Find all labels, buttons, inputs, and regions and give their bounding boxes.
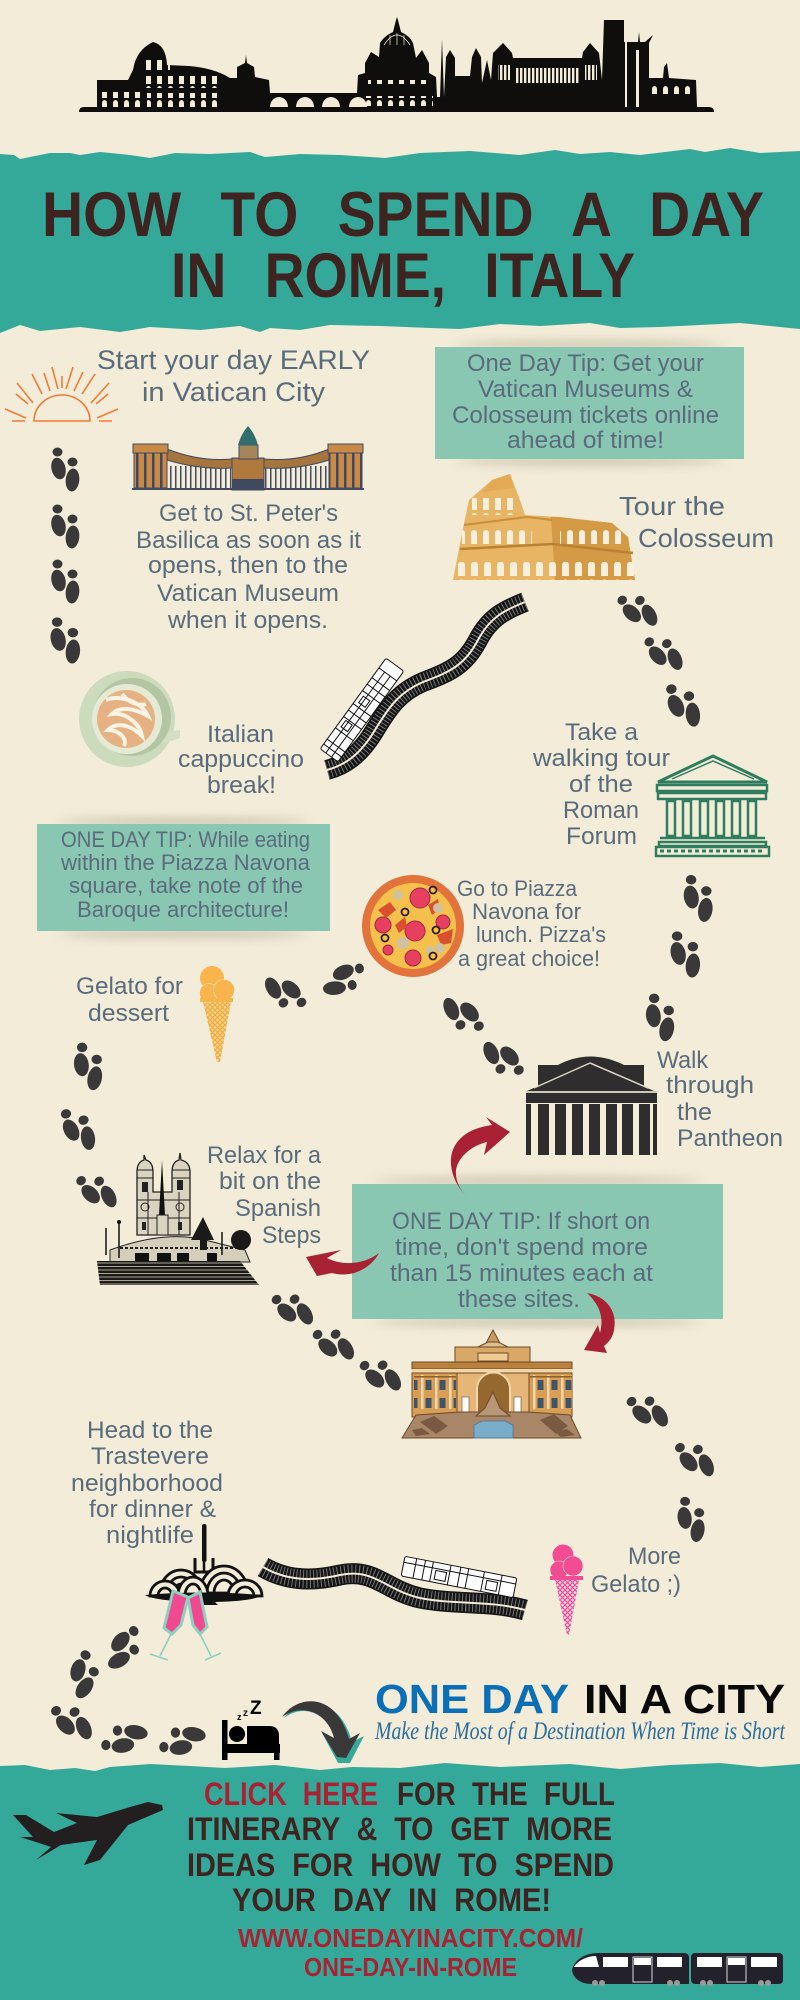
label: more gelato: More [628,1543,681,1570]
label: gelato for dessert: Gelato for [76,973,183,1000]
text: Piazza Navona lunch: a great choice! [458,946,600,971]
footprints trail: Trevi to gelato [622,1385,719,1543]
tip panel: short on time [352,1177,723,1326]
tip panel: Piazza Navona architecture: square, take note of the [69,873,303,898]
label: relax on the Spanish Steps: bit on the [219,1168,321,1195]
text: St. Peter's Basilica: opens, then to the [148,552,348,579]
text: Piazza Navona lunch: Go to Piazza [457,876,578,901]
tip panel: tickets: Colosseum tickets online [452,402,719,429]
label: walking tour of the Roman Forum: Forum [566,823,637,850]
label: gelato for dessert: dessert [88,1000,169,1027]
tip panel: Piazza Navona architecture: within the Piazza Navona [60,850,311,875]
text: Piazza Navona lunch: Navona for [472,899,581,924]
icon: train on curved track [320,602,525,770]
skyline silhouette of Rome [79,17,714,112]
footprints trail: Forum to Pantheon [438,875,715,1086]
icon: St. Peter's Basilica building [132,426,364,490]
icon: sleeping in bed: Z [250,1698,262,1719]
logo: One Day in a City [374,1676,786,1745]
text: Piazza Navona lunch [457,876,606,971]
text: St. Peter's Basilica: Vatican Museum [157,580,339,607]
icon: sleeping in bed [222,1698,280,1760]
tip panel: Piazza Navona architecture: ONE DAY TIP: While eating [61,827,310,852]
label: walk through the Pantheon: through [666,1072,754,1099]
footprints trail: gelato to Spanish Steps [56,1042,122,1219]
icon: airplane [13,1802,163,1865]
icon: sunrise [5,367,118,421]
label: walking tour of the Roman Forum: of the [569,771,633,798]
label: Italian cappuccino break: break! [207,772,276,799]
footer banner [0,1763,800,2000]
text: Trastevere neighborhood: nightlife [106,1522,194,1549]
label: Italian cappuccino break: Italian [207,721,274,748]
label: walk through the Pantheon: Pantheon [677,1125,783,1152]
website link [238,1923,583,1982]
website link: ONE-DAY-IN-ROME [304,1952,517,1982]
icon: spaghetti plate with fork [145,1524,262,1605]
icon: pizza [362,875,464,977]
icon: two champagne glasses [150,1591,221,1660]
icon: orange gelato cone [200,966,234,1062]
label: walk through the Pantheon: Walk [657,1047,709,1074]
train [401,1556,517,1598]
label: tour the Colosseum: Colosseum [638,523,774,553]
text: Trastevere neighborhood [71,1417,223,1549]
tip panel: tickets: One Day Tip: Get your [467,350,704,377]
arrow: tip to Trevi Fountain [584,1293,615,1353]
footprints trail: Colosseum to Forum [613,584,704,732]
heading: start your day: Start your day EARLY [97,345,370,375]
call to action text: FOR THE FULL [397,1776,615,1812]
label: walk through the Pantheon: the [677,1099,712,1126]
title text [42,180,764,311]
logo: One Day in a City: IN A CITY [584,1676,785,1722]
text: Trastevere neighborhood: for dinner & [89,1496,216,1523]
label: tour the Colosseum: Tour the [619,491,725,521]
label: tour the Colosseum [619,491,774,553]
label: relax on the Spanish Steps [207,1142,322,1249]
label: walking tour of the Roman Forum: Take a [565,719,639,746]
call to action text: YOUR DAY IN ROME! [232,1882,551,1918]
label: walk through the Pantheon [657,1047,783,1152]
website link: WWW.ONEDAYINACITY.COM/ [238,1923,583,1953]
label: walking tour of the Roman Forum: Roman [563,797,639,824]
title text: IN ROME, ITALY [171,241,635,311]
icon: train on wavy track [263,1556,525,1610]
icon: Spanish Steps [97,1153,259,1285]
text: St. Peter's Basilica: when it opens. [167,607,328,634]
tip panel: tickets: ahead of time! [507,427,664,454]
tip panel: Piazza Navona architecture [37,818,330,938]
icon: sleeping in bed: z [237,1712,242,1722]
label: more gelato: Gelato ;) [591,1571,681,1598]
text: Trastevere neighborhood: Head to the [87,1417,213,1444]
label: relax on the Spanish Steps: Spanish [235,1195,321,1222]
icon: sleeping in bed: z [243,1708,248,1719]
call to action text: CLICK HERE [204,1776,378,1812]
tip panel: tickets [435,341,744,465]
text: Trastevere neighborhood: neighborhood [71,1470,223,1497]
tip panel: short on time: time, don't spend more [395,1234,648,1261]
call to action text: IDEAS FOR HOW TO SPEND [187,1847,614,1883]
icon: cappuccino cup [79,671,180,767]
footprints trail: dinner to bed [46,1621,207,1759]
icon: Trevi Fountain [402,1330,581,1438]
label: relax on the Spanish Steps: Relax for a [207,1142,322,1169]
label: Italian cappuccino break: cappuccino [178,746,304,773]
heading: start your day [97,345,370,407]
tip panel: short on time: these sites. [458,1286,580,1313]
title banner [0,148,800,333]
footprints trail: morning left [48,448,81,664]
arrow: tip to Pantheon [451,1117,510,1197]
icon: Pantheon [526,1056,657,1155]
tip panel: tickets: Vatican Museums & [478,376,693,403]
label: walking tour of the Roman Forum: walking tour [532,745,670,772]
train [320,658,404,762]
tip panel: Piazza Navona architecture: Baroque architecture! [77,897,289,922]
label: Italian cappuccino break [178,721,304,799]
call to action text [187,1776,615,1918]
logo: One Day in a City: ONE DAY [375,1676,569,1722]
call to action text: ITINERARY & TO GET MORE [187,1811,612,1847]
text: St. Peter's Basilica: Get to St. Peter's [159,500,338,527]
label: relax on the Spanish Steps: Steps [262,1222,321,1249]
label: gelato for dessert [76,973,183,1027]
tip panel: short on time: than 15 minutes each at [390,1260,653,1287]
label: more gelato [591,1543,681,1598]
arrow: curved arrow to banner [282,1701,364,1763]
heading: start your day: in Vatican City [142,377,326,407]
tip panel: short on time: ONE DAY TIP: If short on [392,1208,650,1235]
icon: pink gelato cone [550,1544,583,1635]
footprints trail: gelato to pizza [260,959,368,1019]
icon: tram train [572,1953,783,1986]
text: Trastevere neighborhood: Trastevere [91,1443,209,1470]
text: Piazza Navona lunch: lunch. Pizza's [476,922,606,947]
text: St. Peter's Basilica: Basilica as soon as it [136,527,361,554]
label: walking tour of the Roman Forum [532,719,670,850]
arrow: tip to Spanish Steps [306,1250,379,1276]
text: St. Peter's Basilica [136,500,361,634]
icon: Colosseum [453,474,635,580]
footprints trail: Spanish Steps to Trevi [267,1283,406,1403]
icon: Roman Forum temple [656,756,769,856]
